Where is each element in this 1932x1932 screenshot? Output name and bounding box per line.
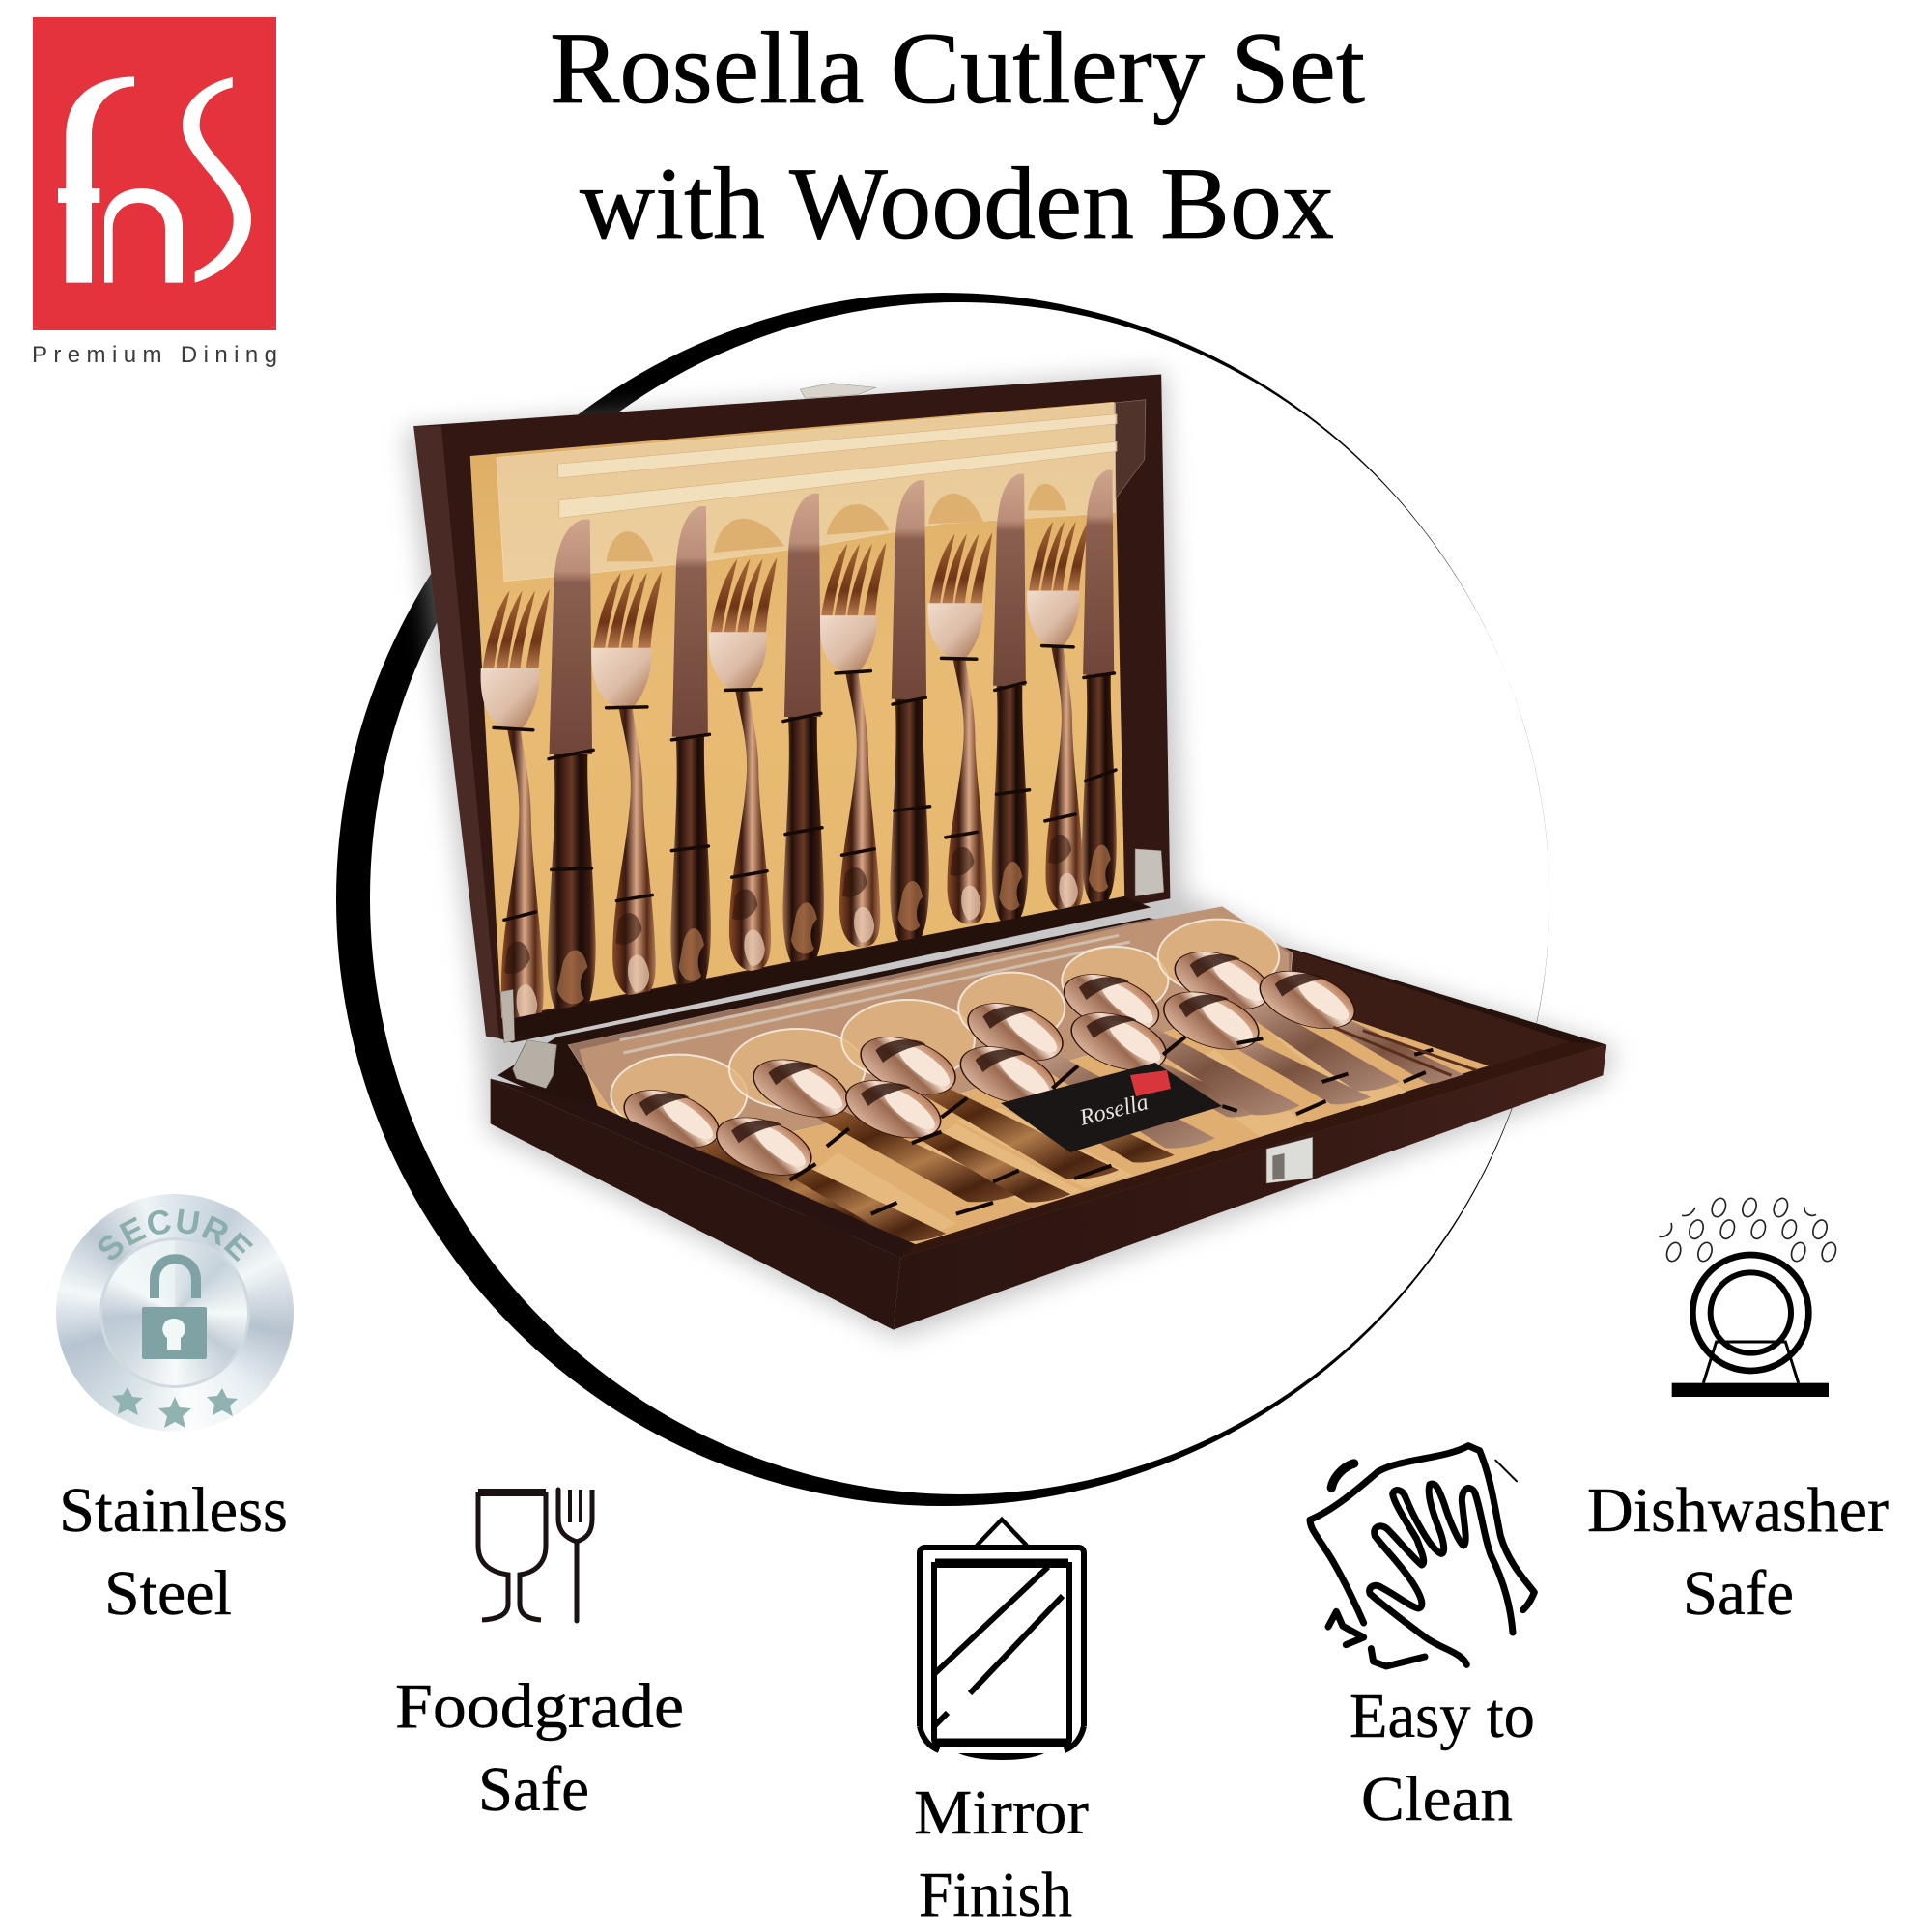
logo letters fnS	[58, 76, 251, 283]
left hinge plate	[500, 989, 515, 1042]
label: Easy to Clean	[1350, 1681, 1535, 1834]
card logo tile	[1130, 1070, 1171, 1096]
forks	[481, 589, 550, 1028]
icon: mirror	[920, 1520, 1084, 1760]
label: Mirror Finish: Finish	[919, 1860, 1072, 1930]
label: Stainless Steel: Steel	[104, 1558, 232, 1629]
lid felt lining	[470, 402, 1124, 1018]
right hinge	[1135, 849, 1164, 896]
base left face	[491, 1079, 900, 1330]
title	[550, 12, 1365, 260]
label: Dishwasher Safe	[1587, 1475, 1889, 1629]
label: Foodgrade Safe: Foodgrade	[395, 1671, 684, 1742]
clear spoon shells	[611, 920, 1279, 1135]
base front face	[894, 1045, 1606, 1330]
lid transparent tray	[497, 403, 1115, 582]
front rim top right	[900, 1041, 1606, 1258]
product card	[1001, 1063, 1222, 1152]
tray pockets	[607, 484, 1067, 561]
spoon bowls	[605, 1084, 738, 1154]
label: Dishwasher Safe: Safe	[1683, 1558, 1794, 1629]
product soft shadow	[406, 372, 1615, 1338]
right inner wall	[1282, 950, 1570, 1067]
card script name: Rosella	[1076, 1090, 1151, 1131]
label: Stainless Steel	[59, 1475, 288, 1629]
tray ridge two	[559, 441, 1117, 518]
icon: secure badge	[56, 1194, 294, 1432]
front rim top left	[491, 1079, 916, 1258]
label: Mirror Finish: Mirror	[914, 1777, 1089, 1848]
left hinge	[513, 1040, 557, 1089]
card body	[1001, 1063, 1222, 1152]
product: open lid with knives and forks	[413, 374, 1170, 1042]
clear tray over spoons	[568, 906, 1293, 1143]
front clasp	[1266, 1137, 1313, 1183]
plate rings	[1692, 1255, 1808, 1371]
water drops	[1659, 1196, 1838, 1264]
lid outer frame	[413, 374, 1170, 1042]
badge inner disc	[99, 1237, 250, 1388]
label: Stainless Steel: Stainless	[59, 1475, 288, 1546]
clasp pin	[1272, 1153, 1285, 1180]
spoon handles bronze	[679, 1086, 1175, 1241]
tray streaks	[620, 935, 1130, 1053]
title: with Wooden Box	[580, 147, 1334, 260]
lid left edge highlight	[413, 426, 499, 1038]
logo tagline: Premium Dining	[32, 342, 277, 368]
tray tab over the lid frame	[1115, 400, 1146, 499]
lid lower dark strip	[501, 896, 1151, 1042]
elastic bands	[494, 645, 1116, 920]
brand logo	[32, 17, 277, 368]
lid top clasp	[800, 384, 876, 398]
icon: dishwasher plate and water	[1659, 1196, 1838, 1397]
right side small knives	[1333, 1027, 1477, 1075]
icon: hand wiping with cloth	[1310, 1446, 1534, 1666]
badge lock and lettering	[99, 1209, 253, 1428]
product: open box base with spoons	[491, 906, 1606, 1330]
badge lock and lettering: SECURE	[99, 1209, 253, 1262]
label: Easy to Clean: Easy to	[1350, 1681, 1535, 1751]
base felt	[579, 906, 1489, 1244]
spoon elastic bands	[790, 1037, 1433, 1214]
logo red tile	[33, 17, 276, 330]
label: Foodgrade Safe	[395, 1671, 684, 1825]
stand base bar	[1672, 1383, 1829, 1397]
icon: food grade glass and fork	[478, 1490, 592, 1621]
label: Mirror Finish	[914, 1777, 1089, 1930]
label: Foodgrade Safe: Safe	[478, 1754, 589, 1825]
label: Easy to Clean: Clean	[1361, 1764, 1513, 1834]
tray ridge one	[558, 414, 1117, 478]
title: Rosella Cutlery Set	[550, 12, 1365, 125]
knives	[548, 520, 596, 1023]
felt tongues between spoons	[793, 1027, 1407, 1243]
label: Dishwasher Safe: Dishwasher	[1587, 1475, 1889, 1546]
base interior wall	[497, 918, 1606, 1258]
spoon handles steel	[1022, 997, 1467, 1149]
black crescent ring behind the product	[336, 293, 1549, 1506]
plate stand	[1703, 1342, 1799, 1383]
